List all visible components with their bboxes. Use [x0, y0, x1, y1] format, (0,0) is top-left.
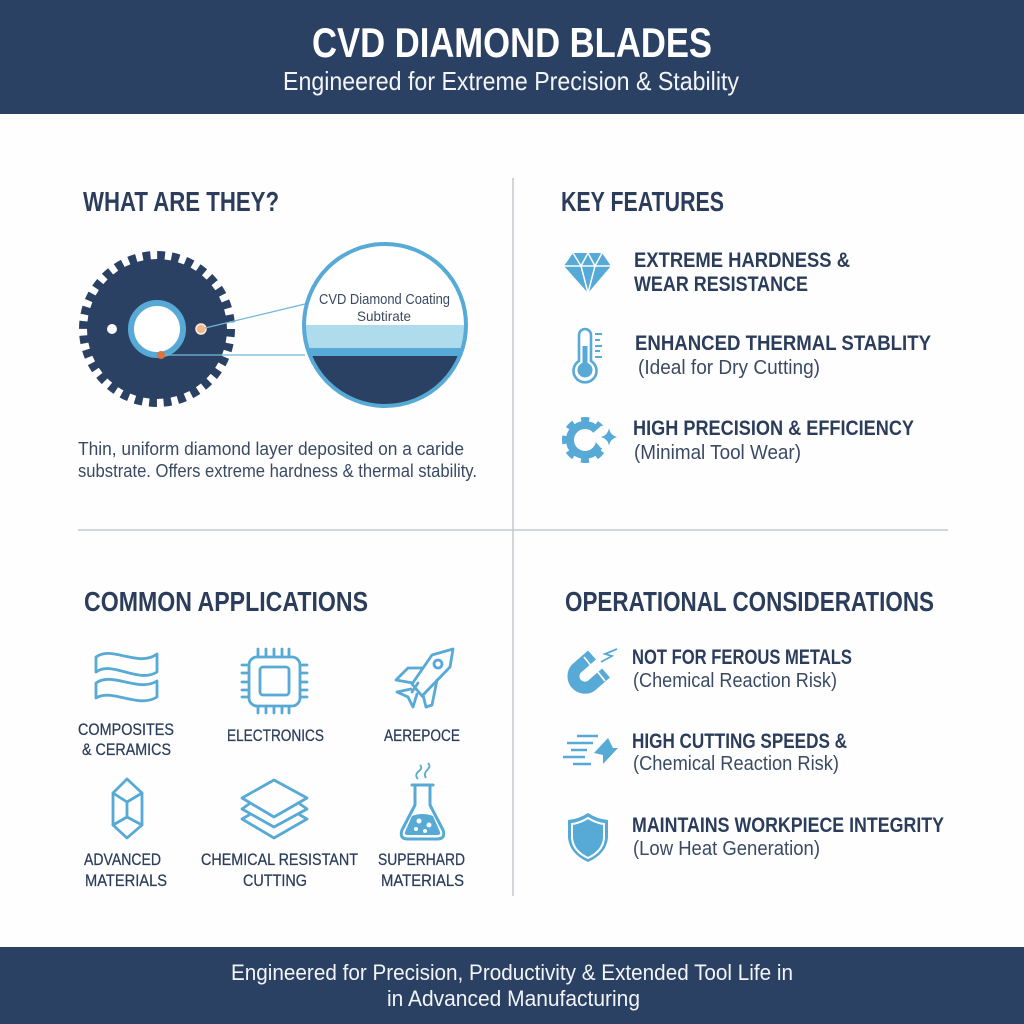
label: advanced materials: [84, 851, 167, 890]
consideration: workpiece integrity: MAINTAINS WORKPIECE INTEGRITY: [632, 814, 944, 837]
label: composites: [78, 721, 174, 759]
label: composites: COMPOSITES: [78, 721, 174, 739]
panel: what are they: [78, 186, 477, 481]
icon: magnet: [573, 649, 617, 688]
icon: chip: [242, 649, 307, 713]
icon: flask: [401, 763, 444, 839]
feature: precision: [633, 417, 914, 464]
icon: composite waves: [96, 653, 157, 701]
consideration: cutting speeds: [632, 730, 847, 775]
icon: crystal: [113, 779, 142, 838]
icon: speed lightning: [563, 736, 618, 764]
header banner: [0, 0, 1024, 114]
label: advanced materials: ADVANCED: [84, 851, 161, 869]
consideration: workpiece integrity: (Low Heat Generation): [633, 838, 820, 860]
label: chemical resistant cutting: CHEMICAL RESISTANT: [201, 851, 358, 869]
consideration: workpiece integrity: [632, 814, 944, 860]
label: chemical resistant cutting: CUTTING: [243, 872, 307, 890]
panel: common applications: [78, 586, 465, 890]
label: superhard materials: SUPERHARD: [378, 851, 465, 869]
description text: Thin, uniform diamond layer deposited on a caride: [78, 439, 464, 459]
consideration: ferrous metals: [632, 646, 852, 692]
label: superhard materials: [378, 851, 465, 890]
feature: thermal stability: [635, 332, 931, 379]
heading: operational considerations: OPERATIONAL CONSIDERATIONS: [565, 586, 934, 617]
title: CVD DIAMOND BLADES: [312, 19, 712, 66]
label: chemical resistant cutting: [201, 851, 358, 890]
description text: substrate. Offers extreme hardness & thermal stability.: [78, 461, 477, 481]
footer text: in Advanced Manufacturing: [387, 986, 640, 1011]
icon: rocket: [396, 649, 453, 707]
substrate label: Subtirate: [357, 308, 411, 324]
diagram: saw blade: [84, 256, 230, 402]
footer text: Engineered for Precision, Productivity & Extended Tool Life in: [231, 960, 793, 985]
feature: hardness: EXTREME HARDNESS &: [634, 249, 850, 272]
label: advanced materials: MATERIALS: [85, 872, 167, 890]
leader lines: [165, 304, 305, 355]
feature: thermal stability: (Ideal for Dry Cutting): [638, 357, 820, 379]
icon: layers: [242, 780, 307, 838]
feature: precision: HIGH PRECISION & EFFICIENCY: [633, 417, 914, 440]
consideration: cutting speeds: (Chemical Reaction Risk): [633, 753, 839, 775]
feature: thermal stability: ENHANCED THERMAL STABLITY: [635, 332, 931, 355]
feature: hardness: WEAR RESISTANCE: [634, 273, 808, 296]
heading: what are they: WHAT ARE THEY?: [83, 186, 279, 217]
consideration: ferrous metals: (Chemical Reaction Risk): [633, 670, 837, 692]
label: aerospace: AEREPOCE: [384, 727, 460, 745]
panel: operational considerations: [563, 586, 944, 862]
icon: gear with sparkle: [564, 420, 619, 460]
label: superhard materials: MATERIALS: [381, 872, 464, 890]
heading: key features: KEY FEATURES: [561, 186, 724, 217]
icon: diamond: [564, 253, 611, 293]
feature: precision: (Minimal Tool Wear): [634, 442, 801, 464]
consideration: ferrous metals: NOT FOR FEROUS METALS: [632, 646, 852, 669]
feature: hardness: [634, 249, 850, 296]
panel: key features: [561, 186, 931, 464]
footer banner: [0, 947, 1024, 1024]
description text: [78, 439, 477, 481]
heading: common applications: COMMON APPLICATIONS: [84, 586, 368, 617]
footer text: [231, 960, 793, 1011]
coating label: CVD Diamond Coating: [319, 291, 450, 308]
icon: shield: [568, 813, 608, 862]
label: electronics: ELECTRONICS: [227, 727, 324, 745]
consideration: cutting speeds: HIGH CUTTING SPEEDS &: [632, 730, 847, 753]
diagram: magnified coating cross-section: [300, 244, 470, 411]
subtitle: Engineered for Extreme Precision & Stability: [283, 66, 739, 96]
label: composites: & CERAMICS: [82, 741, 171, 759]
icon: thermometer: [574, 329, 602, 382]
